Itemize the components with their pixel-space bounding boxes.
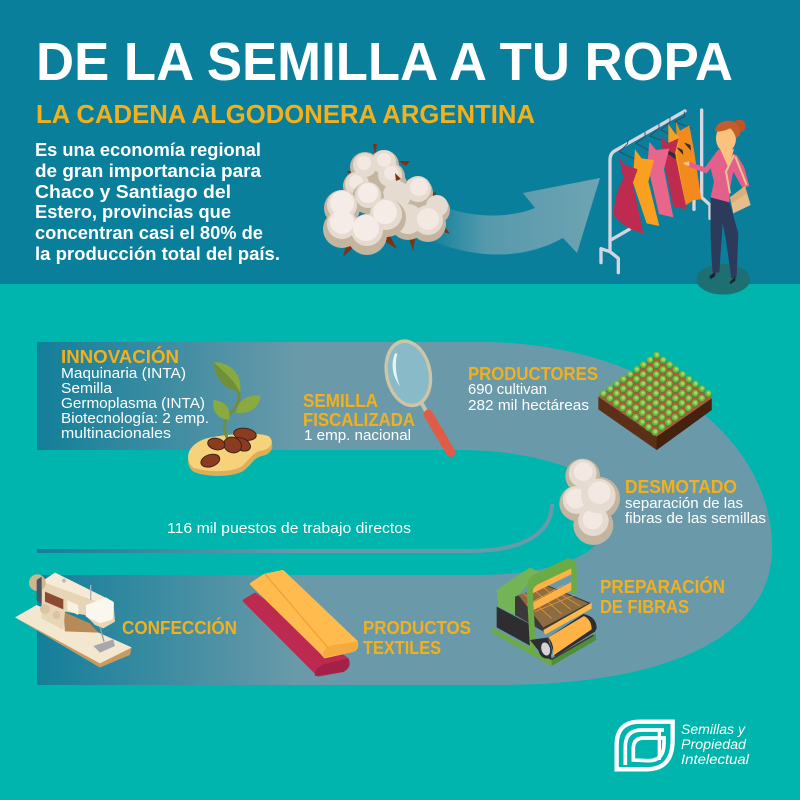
step: productos textiles text: TEXTILES: [363, 638, 441, 658]
step: preparación de fibras text: DE FIBRAS: [600, 597, 689, 617]
icon: loom: [492, 558, 597, 666]
step: innovación text: Maquinaria (INTA): [61, 365, 186, 382]
dress: pink: [647, 142, 673, 217]
logo text: Propiedad: [681, 737, 747, 752]
step: desmotado text: fibras de las semillas: [625, 510, 766, 527]
step: desmotado text: separación de las: [625, 495, 743, 512]
dress: red: [614, 157, 643, 233]
step: innovación text: INNOVACIÓN: [61, 346, 179, 367]
intro text block: Es una economía regional: [35, 140, 261, 160]
dress: crimson: [661, 136, 687, 209]
step: preparación de fibras text: [600, 576, 725, 617]
step: productores text: 690 cultivan: [468, 381, 547, 398]
step: productores text: PRODUCTORES: [468, 364, 598, 384]
label: jobs: 116 mil puestos de trabajo directos: [167, 520, 411, 537]
step: innovación text: Biotecnología: 2 emp.: [61, 410, 209, 427]
intro text block: concentran casi el 80% de: [35, 223, 263, 243]
step: productos textiles text: PRODUCTOS: [363, 618, 471, 638]
dress: orange back: [676, 122, 701, 205]
icon: sprout with seeds: [188, 362, 272, 476]
title: DE LA SEMILLA A TU ROPA: [36, 32, 733, 92]
intro text block: la producción total del país.: [35, 244, 280, 264]
logo text: [681, 722, 750, 767]
flow band: [37, 342, 772, 685]
step: semilla fiscalizada text: SEMILLA: [303, 391, 378, 411]
icon: magnifying glass: [378, 335, 451, 452]
logo: Semillas y Propiedad Intelectual: [617, 722, 750, 769]
icon: sewing machine: [15, 573, 132, 667]
intro text block: Estero, provincias que: [35, 202, 231, 222]
icon: woman shopper: [683, 120, 751, 295]
icon: ginned cotton: [559, 459, 620, 545]
intro text block: Chaco y Santiago del: [35, 182, 231, 202]
step: productos textiles text: [363, 618, 471, 658]
logo text: Semillas y: [681, 722, 746, 737]
step: desmotado text: DESMOTADO: [625, 477, 737, 497]
step: productores text: [468, 364, 598, 414]
step: innovación text: [61, 346, 209, 442]
step: innovación text: Semilla: [61, 380, 113, 397]
step: confección text: CONFECCIÓN: [122, 617, 237, 638]
dress: amber: [668, 124, 686, 205]
arrow: cotton to clothes: [425, 178, 600, 255]
icon: crop field: [598, 352, 712, 450]
intro text block: [35, 140, 280, 264]
step: semilla fiscalizada text: FISCALIZADA: [303, 410, 415, 430]
step: semilla fiscalizada text: [303, 391, 415, 444]
dress: yellow-orange: [633, 149, 659, 226]
step: preparación de fibras text: PREPARACIÓN: [600, 576, 725, 597]
step: desmotado text: [625, 477, 766, 527]
icon: clothes rack: [601, 110, 710, 273]
step: innovación text: Germoplasma (INTA): [61, 395, 205, 412]
step: innovación text: multinacionales: [61, 425, 171, 442]
icon: cotton boll: [322, 144, 450, 257]
connector line: [37, 504, 552, 551]
header band: [0, 0, 800, 284]
logo mark: [617, 722, 673, 769]
icon: folded fabric: [244, 572, 358, 676]
step: semilla fiscalizada text: 1 emp. nacional: [304, 427, 411, 444]
intro text block: de gran importancia para: [35, 161, 262, 181]
step: productores text: 282 mil hectáreas: [468, 397, 589, 414]
subtitle: LA CADENA ALGODONERA ARGENTINA: [36, 99, 535, 129]
logo text: Intelectual: [681, 752, 750, 767]
